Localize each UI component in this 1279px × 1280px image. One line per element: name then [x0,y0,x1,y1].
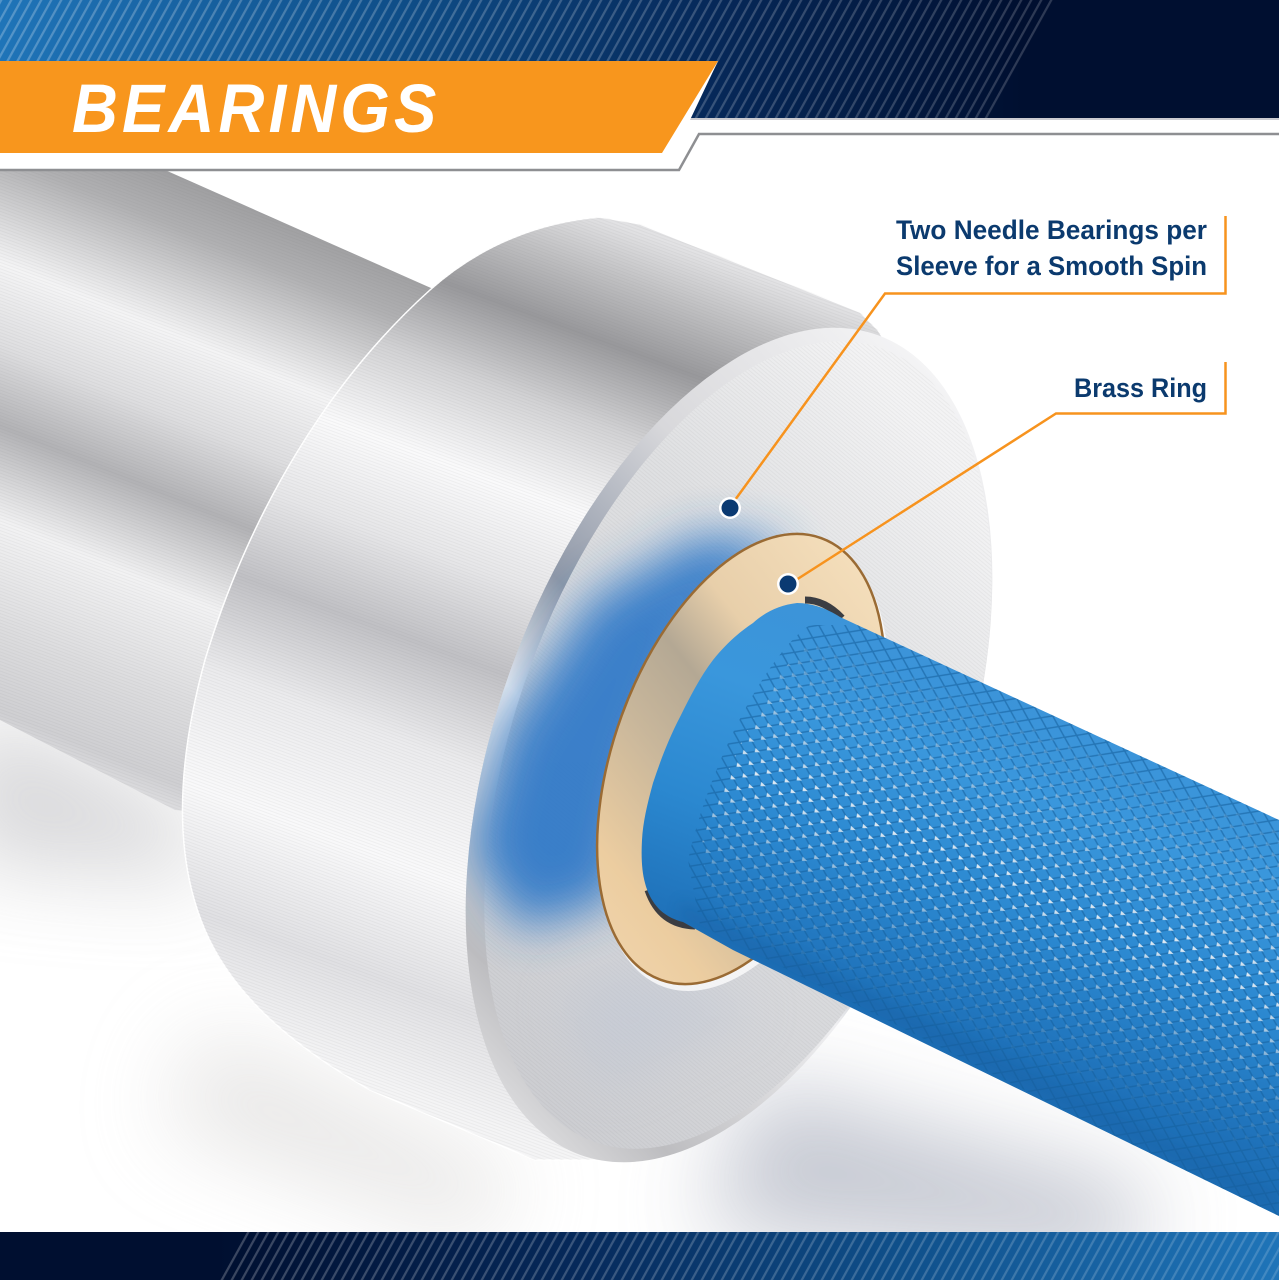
blue knurled handle [642,603,1279,1230]
title: BEARINGS [72,71,436,148]
brass ring [541,495,945,1031]
sleeve end face [466,328,992,1162]
header banner [0,0,1279,120]
white cutout under header [0,61,1279,170]
steel bar shaft [0,170,440,820]
bore gaps beside handle [648,600,842,926]
title band [0,61,718,153]
callout: brass ring [777,362,1226,595]
cast shadow on the surface [0,700,1150,1270]
steel sleeve collar [182,217,985,1160]
callout: needle bearings: Two Needle Bearings per [896,215,1207,245]
callout: brass ring: Brass Ring [1074,373,1207,403]
blue reflection on face [470,535,790,1090]
callout: needle bearings [719,215,1226,519]
grey outline under title band [0,134,1279,170]
callout: needle bearings: Sleeve for a Smooth Spin [896,251,1207,281]
footer banner [0,1232,1279,1280]
